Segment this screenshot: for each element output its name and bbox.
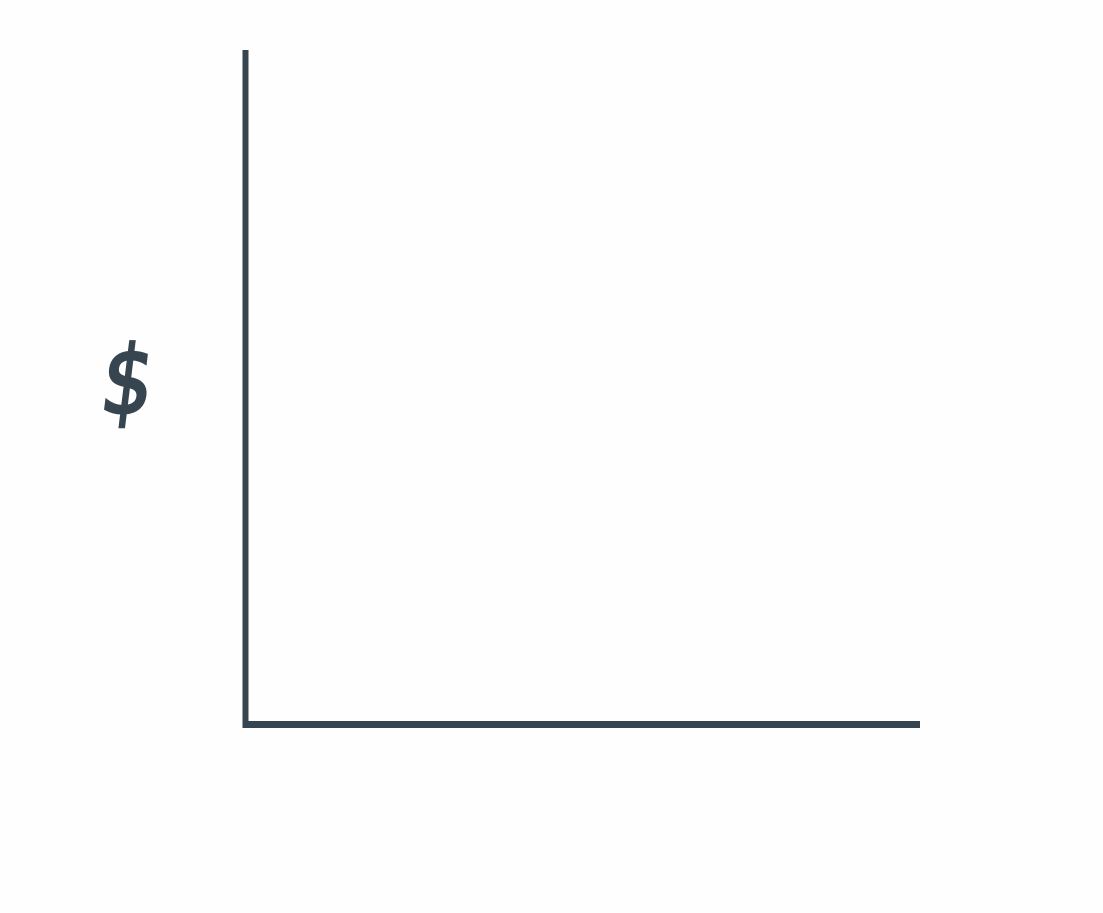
chart axes <box>242 50 920 728</box>
y axis <box>242 50 248 728</box>
y axis label: dollar sign: $ <box>96 325 160 435</box>
x axis <box>242 721 920 728</box>
